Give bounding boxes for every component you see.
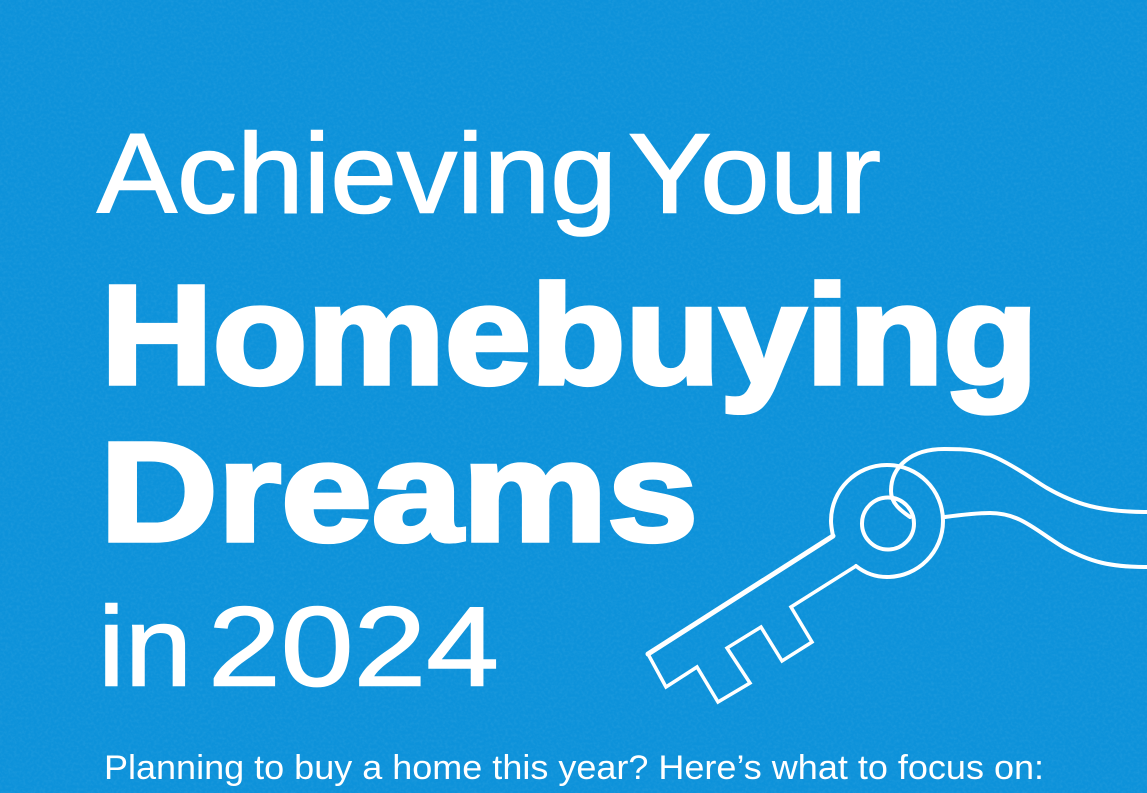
title: Achieving Your Homebuying Dreams in 2024: [97, 110, 1038, 710]
key teeth outline: [648, 566, 856, 702]
title line: Dreams: Dreams: [100, 412, 698, 570]
title line: in 2024: 2024: [208, 584, 499, 710]
key bow outer ring: [831, 465, 943, 577]
key bow hole: [862, 498, 914, 550]
subtitle: Planning to buy a home this year? Here’s what to focus on:: [104, 749, 1044, 787]
icon: key on a cord: [648, 449, 1147, 702]
title line: Achieving Your: [97, 110, 881, 236]
cord lower strand: [945, 513, 1147, 567]
title line: in 2024: [98, 584, 499, 710]
title line: Achieving Your: Your: [628, 110, 881, 236]
title line: Homebuying: Homebuying: [101, 256, 1038, 414]
cord upper strand: [891, 449, 1147, 517]
title line: Achieving Your: Achieving: [97, 110, 617, 236]
key body upper edge: [648, 536, 833, 654]
title line: in 2024: in: [98, 584, 192, 710]
